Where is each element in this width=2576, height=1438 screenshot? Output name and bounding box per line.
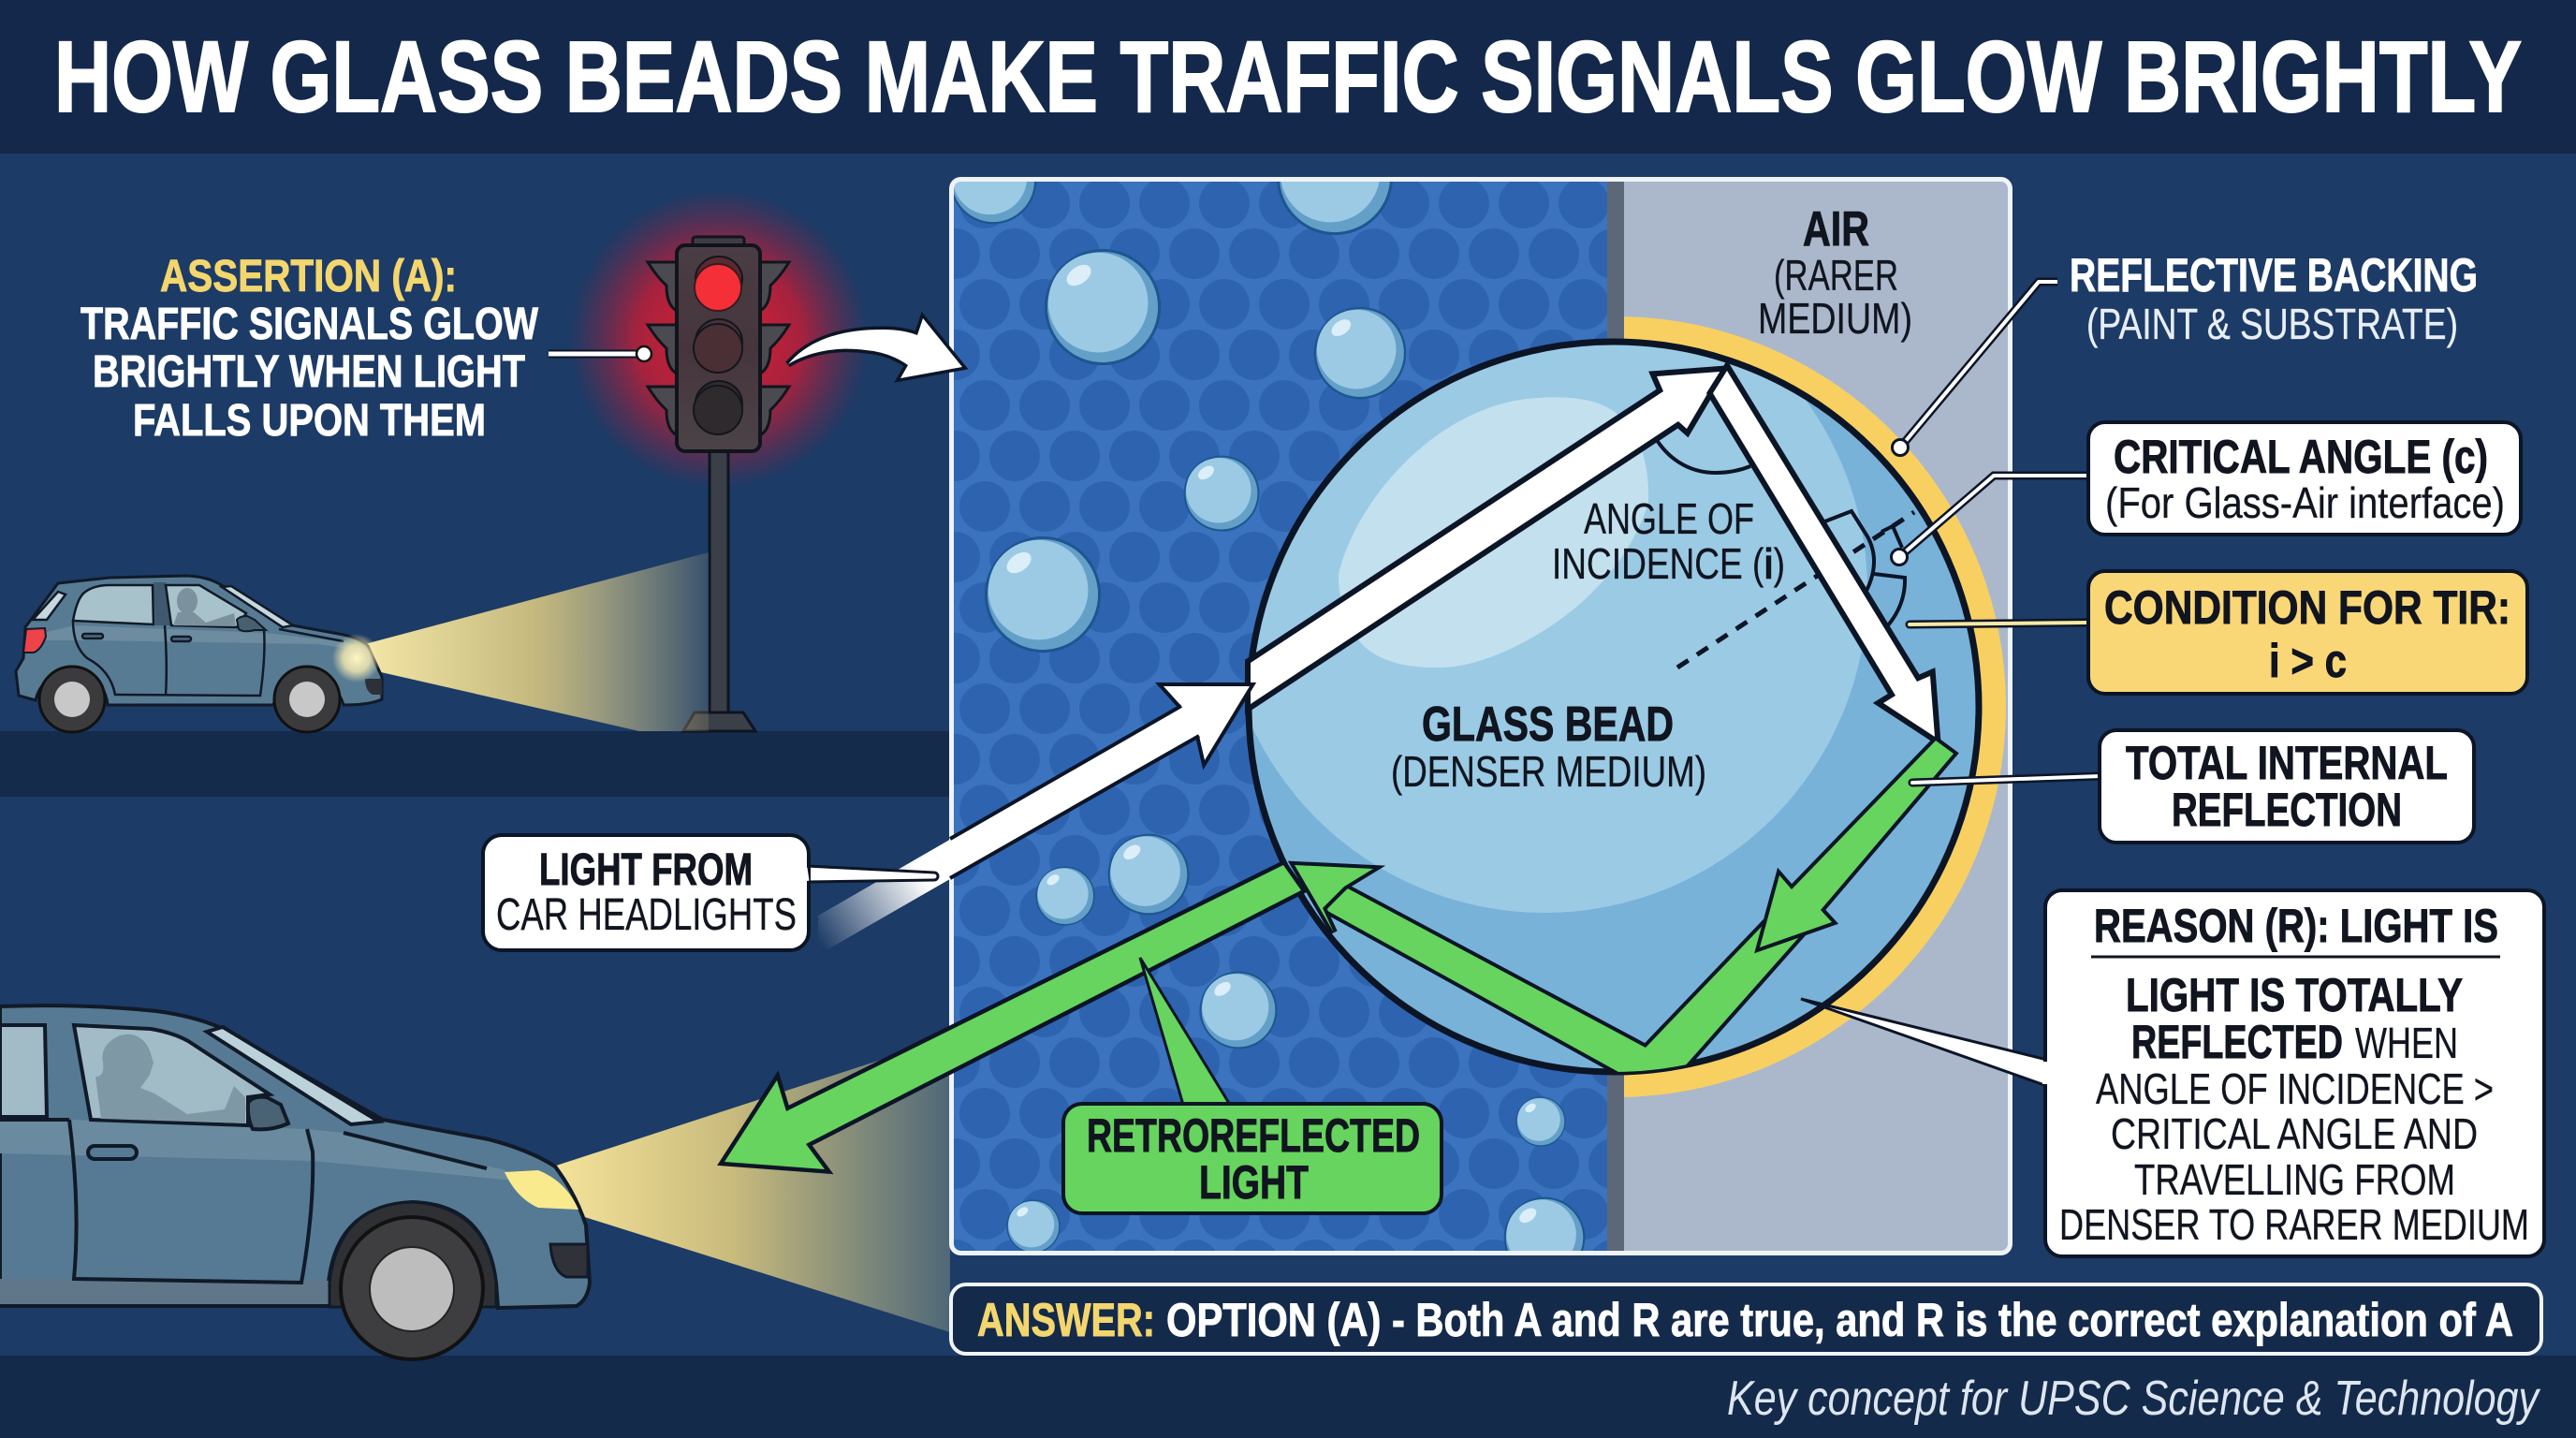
- title banner: [0, 0, 2576, 154]
- air medium: [1608, 180, 2011, 1253]
- green lens: [694, 381, 742, 434]
- answer bar: [951, 1284, 2541, 1354]
- upper body band: [26, 625, 369, 652]
- road: upper: [0, 731, 951, 797]
- amber lens: [694, 319, 742, 373]
- red lens: [695, 257, 742, 311]
- assertion text block: TRAFFIC SIGNALS GLOW: [80, 300, 539, 349]
- door: [0, 1120, 487, 1283]
- angle of incidence arc: [1655, 437, 1750, 473]
- headlight glow: [332, 634, 381, 682]
- air label: MEDIUM): [1758, 294, 1912, 343]
- air label: (RARER: [1774, 251, 1898, 300]
- mirror: [248, 1097, 288, 1129]
- callout: critical angle: [1891, 422, 2521, 565]
- wheel: [341, 1217, 483, 1359]
- bead labels: ANGLE OF: [1584, 494, 1754, 543]
- panel border: [951, 180, 2011, 1253]
- callout: condition for TIR: CONDITION FOR TIR:: [2104, 581, 2510, 634]
- assertion text block: FALLS UPON THEM: [133, 396, 486, 446]
- curved arrow to panel: [788, 318, 962, 378]
- answer bar: ANSWER:: [977, 1294, 1155, 1346]
- green ray: retroreflected out: [724, 865, 1301, 1169]
- callout: reason: [1801, 890, 2544, 1256]
- normal line and critical angle marks: [1677, 511, 1914, 668]
- retroreflected label: LIGHT: [1199, 1156, 1309, 1209]
- label: reflective backing: [1893, 249, 2478, 455]
- headlight: [505, 1170, 578, 1210]
- assertion text block: ASSERTION (A):: [160, 252, 457, 301]
- driver silhouette: [173, 588, 236, 626]
- reflective backing: [1624, 316, 2006, 1097]
- callout: reason: WHEN: [2355, 1019, 2458, 1067]
- door handle: [88, 1146, 137, 1159]
- wheel arch: [329, 1202, 496, 1307]
- label: reflective backing: (PAINT & SUBSTRATE): [2086, 300, 2458, 348]
- driver silhouette: [95, 1034, 245, 1123]
- car: large: [0, 1005, 590, 1359]
- side windows: [0, 1025, 379, 1125]
- road: lower footer band: [0, 1356, 2576, 1438]
- green ray: reflected inside bead: [1295, 741, 1954, 1077]
- panel: bead diagram: [950, 120, 2012, 1277]
- pole: [683, 448, 755, 731]
- traffic light: [648, 237, 789, 731]
- callout: total internal reflection: REFLECTION: [2172, 784, 2402, 836]
- air label: [1758, 202, 1912, 343]
- tail light: [23, 628, 46, 653]
- callout: total internal reflection: TOTAL INTERNAL: [2126, 737, 2448, 789]
- bead labels: (DENSER MEDIUM): [1391, 747, 1706, 796]
- callout: condition for TIR: i > c: [2269, 635, 2347, 687]
- car: small: [16, 576, 382, 732]
- callout: reason: CRITICAL ANGLE AND: [2111, 1109, 2478, 1158]
- vent: [365, 679, 382, 695]
- wheels: [39, 667, 105, 732]
- retroreflected label: [1063, 958, 1442, 1213]
- callout: critical angle: (For Glass-Air interface): [2105, 478, 2505, 527]
- bubbles: [951, 120, 1584, 1277]
- incoming white ray: [818, 684, 1253, 955]
- red glow: [569, 189, 869, 489]
- callout: condition for TIR: [1910, 571, 2527, 694]
- callout: reason: TRAVELLING FROM: [2134, 1155, 2455, 1204]
- bead labels: [1391, 494, 1785, 796]
- divider: [1607, 180, 1624, 1253]
- assertion text block: [80, 252, 539, 446]
- callout: reason: REFLECTED: [2131, 1016, 2343, 1068]
- door lines: [73, 621, 344, 696]
- mirror: [237, 616, 266, 631]
- white ray to reflective surface: [1713, 371, 1935, 737]
- callout: light from car headlights: [483, 835, 938, 950]
- callout: light from car headlights: CAR HEADLIGHTS: [496, 890, 797, 940]
- bead labels: GLASS BEAD: [1422, 697, 1674, 752]
- bead labels: INCIDENCE (i): [1552, 539, 1785, 588]
- headlight beam: small car: [351, 552, 709, 731]
- headlight beam: large car: [548, 1037, 950, 1332]
- air label: AIR: [1803, 202, 1869, 257]
- callout: reason: LIGHT IS TOTALLY: [2126, 969, 2463, 1021]
- pillar: [154, 582, 172, 625]
- bumper vent: [550, 1244, 588, 1277]
- assertion text block: BRIGHTLY WHEN LIGHT: [93, 347, 525, 397]
- callout: critical angle: CRITICAL ANGLE (c): [2114, 431, 2488, 483]
- callout: light from car headlights: LIGHT FROM: [539, 845, 753, 895]
- windows: [33, 585, 293, 627]
- upper body light band: [0, 1120, 524, 1181]
- retroreflected label: RETROREFLECTED: [1087, 1109, 1420, 1162]
- glass bead: [1245, 339, 1983, 1075]
- connector: assertion to signal: [549, 346, 651, 361]
- visors: [648, 262, 789, 435]
- white ray inside bead: [1251, 372, 1720, 704]
- lower body shade: [0, 1279, 329, 1304]
- callout: total internal reflection: [1912, 730, 2474, 843]
- water / retroreflective medium: [952, 180, 1608, 1253]
- housing: [677, 245, 760, 451]
